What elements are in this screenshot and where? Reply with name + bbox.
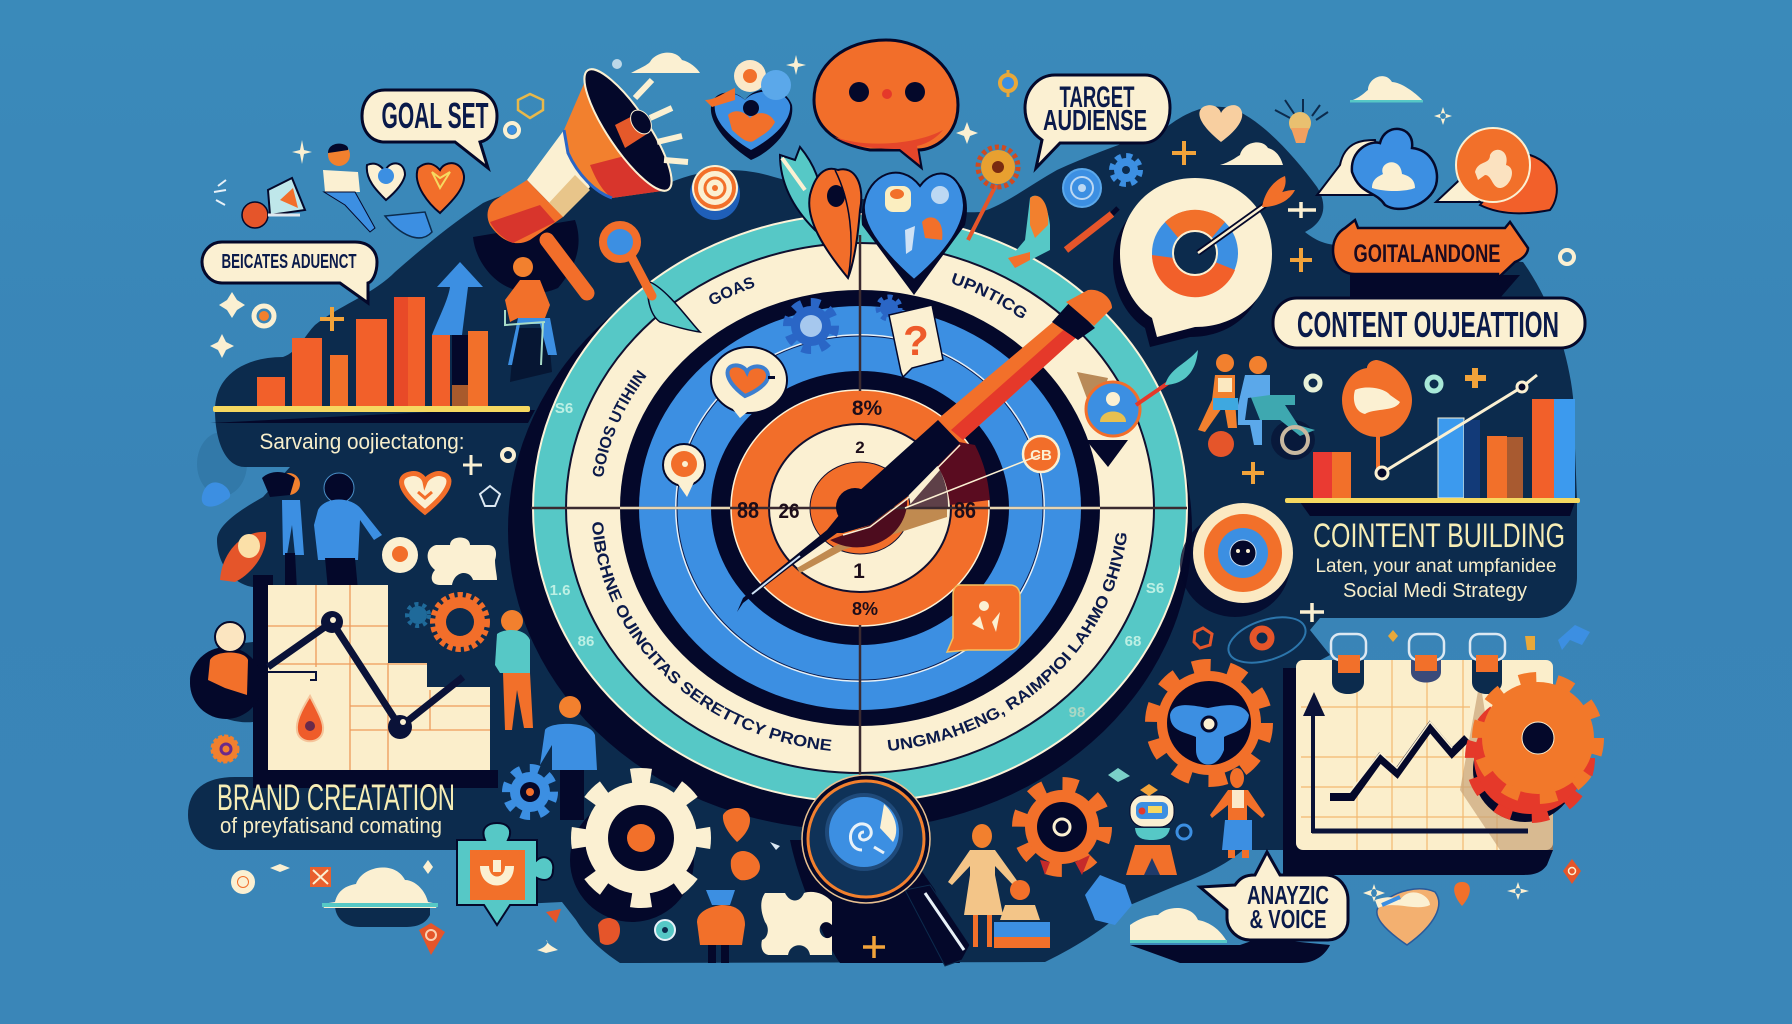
icon: target speech bubble with arrow (1113, 176, 1295, 347)
target numbers: 1 (853, 560, 865, 583)
heading: brand creation: BRAND CREATATION (217, 777, 455, 818)
icon: feather and orange leaf (780, 147, 861, 278)
icon: balloon and clouds (1275, 76, 1452, 143)
heading: brand creation (217, 777, 455, 838)
ring labels: GOAS (709, 277, 754, 304)
icon: big orange gear (1470, 678, 1598, 822)
chart: left bar chart (213, 262, 530, 412)
icon: orange chat bubble (947, 585, 1020, 652)
icon: lower right marks (1108, 768, 1581, 945)
panel: dark background blob (188, 107, 1577, 963)
icon: blue puzzle (1085, 875, 1132, 925)
icon: heart bubble (711, 347, 787, 418)
callout: content bubble: CONTENT OUJEATTION (1297, 304, 1559, 345)
heading: content building: Social Medi Strategy (1343, 580, 1527, 602)
icon: woman in skirt (1210, 768, 1265, 858)
chart: target wheel (508, 213, 1192, 827)
icon: blue gears inside target (788, 297, 900, 349)
icon: large cream gear (570, 778, 701, 922)
callout: audience note: BEICATES ADUENCT (222, 251, 356, 273)
icon: orange dot circle (382, 537, 418, 573)
callout: content bubble (1273, 298, 1585, 348)
icon: magnifier (790, 775, 970, 966)
ring numbers (550, 400, 1164, 721)
icon: teal leaf (648, 282, 700, 332)
icon: target token orange (690, 165, 740, 220)
ring labels: UPNTICG (952, 272, 1026, 318)
icon: cloud avatars (1317, 128, 1557, 213)
icon: orange token (1023, 436, 1059, 472)
ring numbers: 68 (1125, 633, 1141, 650)
icon: teal person (495, 610, 533, 730)
ring numbers: 1.6 (550, 582, 570, 599)
target numbers (737, 397, 976, 619)
icon: small marks under heading (1194, 603, 1590, 671)
icon: avatar badge with brush (1077, 350, 1198, 467)
icon: orange tags (723, 808, 780, 880)
icon: teal puzzle (457, 823, 553, 925)
callout: goal set: GOAL SET (382, 95, 489, 136)
ring labels: OIBCHNE OUINCITAS SERETTCY PRONE (592, 522, 832, 751)
target numbers: 88 (737, 497, 759, 523)
icon: couple figures (262, 472, 382, 590)
icon: small left marks (210, 94, 543, 475)
callout: analyzic and voice (1200, 852, 1348, 940)
callout: orange tag (1333, 220, 1528, 278)
icon: orange magnifier (603, 225, 652, 296)
icon: upper-right marks on blob (1172, 105, 1316, 484)
icon: sun pin (968, 147, 1018, 240)
heading: content building: COINTENT BUILDING (1313, 517, 1565, 555)
callout: speech bubble with eyes (814, 40, 958, 167)
callout: analyzic and voice: & VOICE (1250, 904, 1326, 934)
icon: orange dot bubble (663, 444, 705, 497)
callout: target audience: AUDIENSE (1043, 105, 1147, 137)
icon: ring right of tag (1560, 250, 1574, 264)
target numbers: 8% (852, 397, 882, 420)
icon: cream puzzle left (428, 538, 497, 585)
icon: blue gear (507, 769, 553, 815)
icon: orange person bottom (697, 890, 745, 963)
icon: cloud lower right (1130, 908, 1227, 943)
callout: target audience (1025, 75, 1170, 168)
icon: seated person (505, 257, 557, 382)
chart: right bar chart with pin and line (1285, 360, 1580, 503)
icon: woman and child (948, 824, 1050, 948)
ring numbers: 98 (1069, 704, 1085, 721)
icon: blue heart (862, 173, 967, 295)
icon: robot speech and orange figure (1126, 795, 1191, 875)
icon: orange gear bottom (1019, 784, 1105, 875)
icon: small heart and hexagon (202, 474, 500, 512)
target numbers: 8% (852, 599, 878, 619)
ring numbers: 86 (578, 633, 594, 650)
chart: staircase line chart (268, 585, 490, 770)
icon: plus mark (863, 936, 885, 958)
icon: question note (889, 305, 943, 377)
icon: cloud lower left (322, 868, 438, 908)
icon: lower left marks (212, 736, 675, 955)
icon: orange gear left (407, 596, 486, 648)
icon: cream puzzle bottom (761, 892, 832, 955)
icon: small heart top (705, 60, 792, 160)
text: left chart caption: Sarvaing oojiectatong: (260, 429, 464, 454)
icon: person and hearts group (214, 144, 464, 238)
heading: brand creation: of preyfatisand comating (220, 813, 442, 838)
callout: audience note (202, 242, 377, 303)
icon: bald person (190, 622, 262, 719)
chart: calendar line chart (1296, 634, 1553, 850)
callout: goal set (362, 90, 497, 168)
icon: eye badge (1180, 503, 1293, 617)
ring numbers: S6 (555, 400, 573, 417)
icon: top centre marks (612, 53, 1140, 268)
icon: megaphone (488, 59, 688, 293)
target numbers: 26 (778, 500, 800, 523)
icon: couple on scooter (1198, 354, 1315, 460)
heading: content building (1313, 517, 1565, 602)
target numbers: 2 (855, 438, 865, 457)
ring labels: UNGMAHENG, RAIMPIOI LAHMO GHIVIG (888, 533, 1126, 751)
ring numbers: S6 (1146, 580, 1164, 597)
callout: target audience: TARGET (1060, 81, 1134, 114)
icon: rocket leaf (220, 532, 266, 582)
icon: pen (737, 290, 1112, 612)
ring labels (592, 272, 1126, 751)
icon: question note: ? (903, 317, 929, 364)
heading: content building: Laten, your anat umpfanidee (1316, 556, 1556, 577)
icon: orange ring gear with blue spinner (1152, 666, 1266, 780)
target numbers: 86 (954, 497, 976, 523)
icon: orange token: CB (1030, 447, 1052, 464)
callout: orange tag: GOITALANDONE (1354, 240, 1500, 268)
callout: analyzic and voice: ANAYZIC (1247, 880, 1329, 910)
icon: blue person (540, 696, 597, 820)
